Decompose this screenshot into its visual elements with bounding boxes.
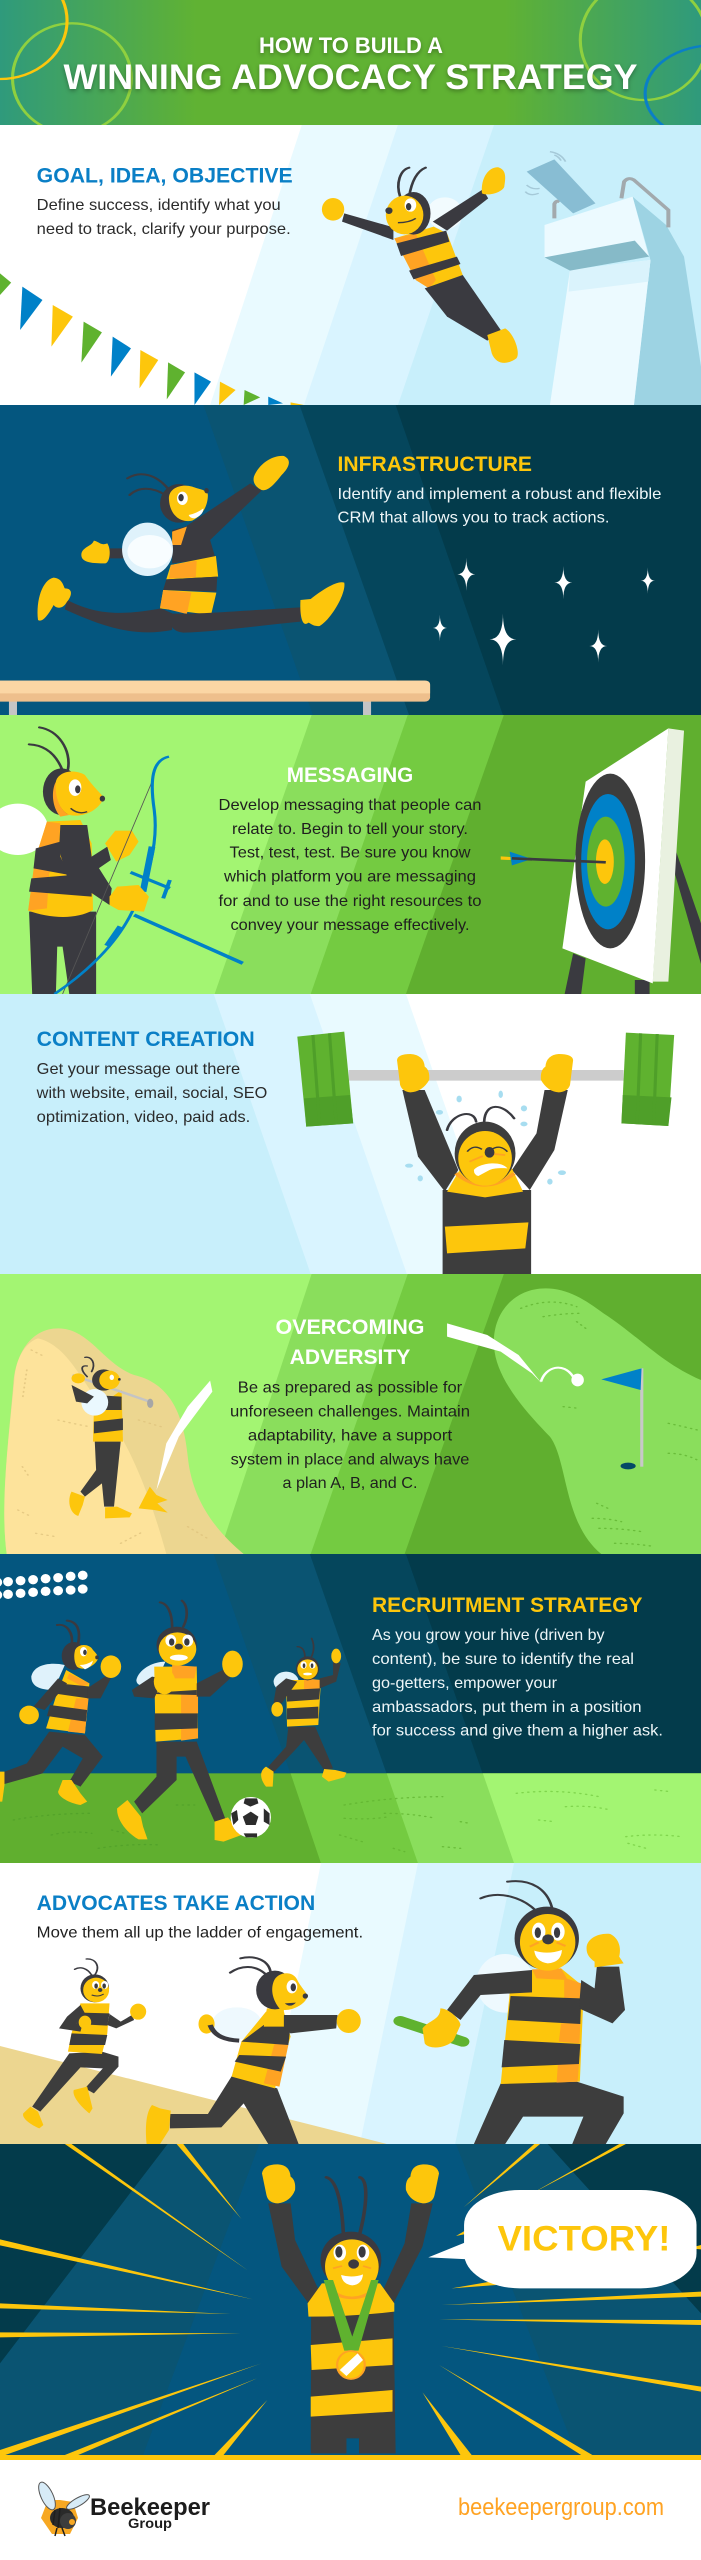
panel: content creation [0, 994, 701, 1274]
panel: victory [0, 2144, 701, 2455]
heading: goal, idea, objective: GOAL, IDEA, OBJECTIVE [37, 164, 293, 188]
text block: messaging description: Develop messaging that people can [218, 797, 482, 814]
heading: infrastructure: INFRASTRUCTURE [338, 453, 532, 476]
panel: goal, idea, objective [0, 125, 701, 405]
panel: recruitment strategy [0, 1554, 701, 1863]
title [64, 33, 638, 97]
text block: recruitment description: go-getters, empower your [372, 1675, 558, 1692]
yellow divider band [0, 2455, 701, 2460]
panel: advocates take action [0, 1863, 701, 2144]
text block: content description: optimization, video, paid ads. [37, 1109, 250, 1126]
logo wordmark: Group [128, 2515, 172, 2531]
text block: infrastructure description: Identify and implement a robust and flexible [338, 486, 662, 503]
text block: adversity description: Be as prepared as possible for [238, 1380, 463, 1397]
text block: advocates description: Move them all up the ladder of engagement. [37, 1925, 363, 1942]
text block: infrastructure description: CRM that allows you to track actions. [338, 510, 610, 527]
heading: overcoming adversity: ADVERSITY [290, 1346, 410, 1369]
text block: messaging description: convey your message effectively. [230, 917, 470, 934]
text block: infrastructure description [338, 486, 662, 527]
panel: messaging [0, 715, 701, 994]
icon: beekeeper logo [35, 2480, 91, 2536]
text block: recruitment description: ambassadors, put them in a position [372, 1699, 642, 1716]
text block: messaging description: which platform you are messaging [223, 869, 476, 886]
text block: messaging description: for and to use the right resources to [218, 893, 482, 910]
text block: messaging description: Test, test, test. Be sure you know [230, 845, 471, 862]
website url: beekeepergroup.com [458, 2494, 664, 2521]
text block: adversity description: unforeseen challenges. Maintain [230, 1404, 470, 1421]
heading: content creation: CONTENT CREATION [37, 1028, 255, 1051]
text block: adversity description [230, 1380, 470, 1492]
title: WINNING ADVOCACY STRATEGY [64, 58, 638, 97]
text block: adversity description: system in place and always have [231, 1451, 469, 1468]
header banner [0, 0, 701, 142]
text block: recruitment description: content), be sure to identify the real [372, 1651, 634, 1668]
text block: recruitment description: for success and give them a higher ask. [372, 1723, 663, 1740]
heading: advocates take action: ADVOCATES TAKE ACTION [37, 1892, 315, 1915]
logo wordmark: Beekeeper [90, 2494, 210, 2521]
text block: content description: Get your message out there [37, 1061, 240, 1078]
text block: recruitment description [372, 1627, 663, 1740]
text block: messaging description [218, 797, 482, 934]
heading: overcoming adversity [276, 1316, 424, 1369]
heading: recruitment strategy: RECRUITMENT STRATEGY [372, 1594, 642, 1617]
text block: messaging description: relate to. Begin to tell your story. [232, 821, 468, 838]
callout: victory: VICTORY! [498, 2220, 670, 2259]
text block: adversity description: a plan A, B, and C. [282, 1475, 418, 1492]
text block: goal description: Define success, identify what you [37, 197, 281, 214]
text block: recruitment description: As you grow your hive (driven by [372, 1627, 604, 1644]
panel: infrastructure [0, 405, 701, 715]
text block: goal description: need to track, clarify your purpose. [37, 221, 291, 238]
text block: content description: with website, email, social, SEO [36, 1085, 267, 1102]
title: HOW TO BUILD A [259, 33, 443, 58]
panel: overcoming adversity [0, 1274, 701, 1554]
text block: goal description [37, 197, 291, 238]
heading: messaging: MESSAGING [287, 764, 413, 787]
footer [0, 2460, 701, 2560]
text block: content description [36, 1061, 267, 1126]
heading: overcoming adversity: OVERCOMING [276, 1316, 424, 1339]
text block: adversity description: adaptability, have a support [248, 1427, 453, 1444]
